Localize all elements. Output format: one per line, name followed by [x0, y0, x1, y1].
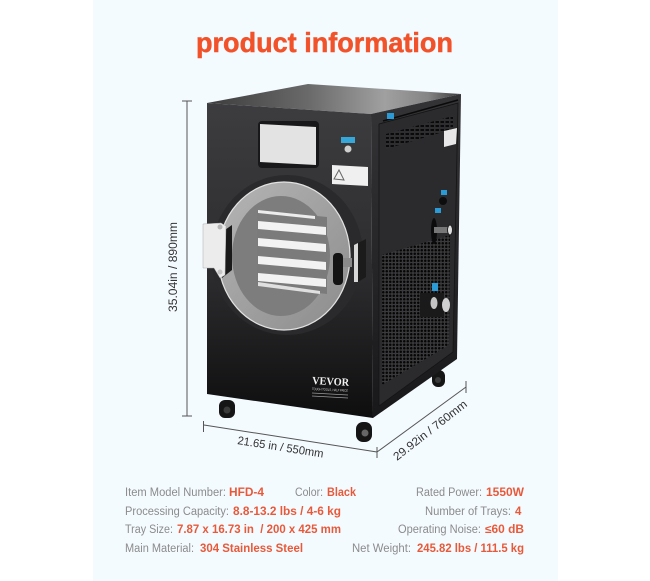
- spec: color: Color:: [295, 487, 323, 499]
- warning label: [332, 165, 368, 186]
- depth dimension: 29.92in / 760mm: [391, 398, 470, 463]
- spec: operating noise: ≤60 dB: [485, 524, 524, 536]
- height dimension: 35.04in / 890mm: [168, 222, 180, 312]
- trays: [257, 210, 327, 294]
- chamber: [232, 196, 330, 316]
- power button with blue tag: [341, 137, 355, 152]
- spec: tray size: 7.87 x 16.73 in / 200 x 425 mm: [177, 524, 341, 536]
- width dimension: 21.65 in / 550mm: [237, 435, 324, 461]
- VEVOR logo: TOUGH TOOLS, HALF PRICE: [312, 387, 349, 393]
- spec: main material: [125, 543, 303, 555]
- depth dimension: [377, 381, 470, 463]
- spec: tray size: Tray Size:: [125, 524, 173, 536]
- spec: operating noise: Operating Noise:: [398, 524, 481, 536]
- spec: main material: Main Material:: [125, 543, 194, 555]
- spec: rated power: Rated Power:: [416, 487, 482, 499]
- VEVOR logo: VEVOR: [312, 375, 350, 389]
- specifications: [125, 487, 524, 555]
- spec: net weight: Net Weight:: [352, 543, 411, 555]
- height dimension: [168, 101, 192, 416]
- spec: number of trays: 4: [515, 506, 522, 518]
- side top vent: [386, 116, 453, 149]
- side top strip: [383, 100, 458, 121]
- spec: number of trays: Number of Trays:: [425, 506, 511, 518]
- side blue tag: [387, 113, 394, 119]
- side sticker: [444, 128, 457, 147]
- touch screen: [258, 121, 319, 168]
- glass door: [218, 182, 350, 330]
- spec: net weight: 245.82 lbs / 111.5 kg: [417, 543, 524, 555]
- door hinge: [203, 223, 232, 278]
- freeze dryer machine: [203, 84, 461, 442]
- side panel edge: [379, 103, 458, 406]
- spec: color: Black: [327, 487, 357, 499]
- VEVOR logo: [312, 375, 350, 398]
- width dimension: [204, 421, 377, 461]
- door handle: [333, 239, 366, 285]
- casters: [219, 370, 445, 442]
- spec: processing capacity: 8.8-13.2 lbs / 4-6 kg: [233, 506, 341, 518]
- side lower mesh: [382, 235, 450, 385]
- spec: rated power: [416, 487, 524, 499]
- spec: net weight: [352, 543, 524, 555]
- door surround: [211, 175, 363, 335]
- spec: rated power: 1550W: [486, 487, 524, 499]
- spec: item model number: Item Model Number:: [125, 487, 226, 499]
- spec: item model number: HFD-4: [229, 487, 265, 499]
- background panel: [93, 0, 558, 581]
- spec: color: [295, 487, 357, 499]
- spec: processing capacity: [125, 506, 341, 518]
- front face: [207, 103, 373, 418]
- side fittings: [420, 190, 452, 317]
- side face: [371, 94, 461, 418]
- spec: operating noise: [398, 524, 524, 536]
- top face: [207, 84, 461, 114]
- title: product information: [196, 27, 453, 58]
- spec: processing capacity: Processing Capacity:: [125, 506, 229, 518]
- spec: main material: 304 Stainless Steel: [200, 543, 303, 555]
